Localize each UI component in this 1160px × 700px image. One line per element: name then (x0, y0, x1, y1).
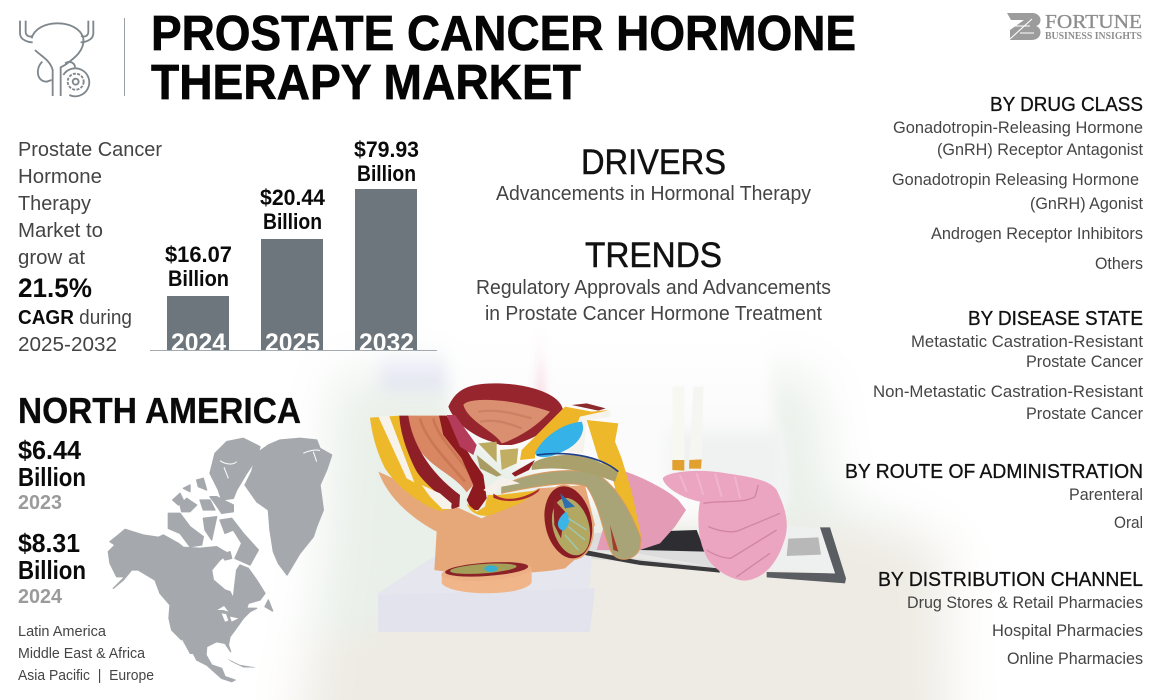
cross-section slab (442, 570, 532, 593)
text block: market growth summary: Prostate Cancer (18, 138, 162, 161)
bar 2024: 2024 (171, 329, 226, 357)
panel: by drug class: Gonadotropin-Releasing Hormone (893, 119, 1143, 137)
anatomical pelvic model (370, 383, 642, 632)
list: other regions: Latin America (18, 623, 107, 640)
list: other regions (18, 623, 154, 684)
list: other regions: Asia Pacific | Europe (18, 667, 154, 684)
panel: by disease state (873, 308, 1143, 423)
panel: North America heading and values: Billion (18, 462, 86, 492)
panel: by disease state: BY DISEASE STATE (968, 308, 1143, 330)
text block: market growth summary: 21.5% (18, 273, 92, 303)
text block: market growth summary: Hormone (18, 165, 102, 188)
panel: by route of administration: BY ROUTE OF ADMINISTRATION (845, 461, 1143, 483)
bar 2032: Billion (357, 161, 416, 186)
panel: by distribution channel (878, 569, 1143, 668)
panel: by distribution channel: Hospital Pharmacies (992, 622, 1143, 640)
bar 2032 (354, 137, 419, 357)
Greenland (245, 438, 332, 575)
panel: by route of administration (845, 461, 1143, 532)
panel: trends: TRENDS (585, 236, 722, 275)
panel: by drug class: BY DRUG CLASS (990, 94, 1143, 116)
Arctic archipelago (168, 478, 258, 565)
panel: by distribution channel: Online Pharmacies (1007, 650, 1143, 668)
logo: Fortune Business Insights (1007, 11, 1142, 42)
text block: market growth summary: 2025-2032 (18, 333, 117, 356)
Ellesmere Island (210, 438, 260, 500)
bar 2024 (165, 245, 231, 350)
panel: by drug class: Androgen Receptor Inhibitors (931, 225, 1143, 243)
background photo: doctor with anatomical model (290, 355, 960, 700)
text block: market growth summary (18, 138, 162, 356)
panel: by drug class (892, 94, 1143, 273)
text block: market growth summary: CAGR during (18, 306, 132, 329)
panel: by disease state: Non-Metastatic Castration-Resistant (873, 383, 1143, 401)
panel: drivers: DRIVERS (581, 143, 726, 182)
skin body (378, 472, 595, 574)
text block: market growth summary: Therapy (18, 192, 92, 215)
prostate (477, 455, 502, 477)
panel: by distribution channel: Drug Stores & Retail Pharmacies (907, 594, 1143, 612)
text block: market growth summary: grow at (18, 246, 85, 269)
shaft (502, 471, 641, 559)
pelvis yellow tissue (370, 416, 451, 511)
bladder (448, 383, 563, 445)
panel: North America heading and values: 2024 (18, 586, 63, 608)
bar 2032: $79.93 (354, 137, 419, 162)
left glove (597, 470, 686, 550)
clipboard on table (585, 525, 846, 583)
panel: trends: Regulatory Approvals and Advancements (476, 277, 831, 299)
right glove (663, 471, 787, 581)
text block: market growth summary: Market to (18, 219, 103, 242)
bar 2024: Billion (168, 266, 229, 291)
panel: drivers: Advancements in Hormonal Therapy (496, 183, 811, 205)
panel: by drug class: Others (1095, 255, 1143, 273)
panel: by disease state: Prostate Cancer (1026, 353, 1143, 371)
panel: drivers (496, 143, 811, 205)
mainland (108, 529, 265, 682)
panel: by disease state: Prostate Cancer (1026, 405, 1143, 423)
panel: by drug class: (GnRH) Agonist (1030, 195, 1143, 213)
Caribbean and Newfoundland (228, 600, 273, 667)
map: North America and Greenland (108, 438, 332, 682)
panel: by route of administration: Parenteral (1069, 486, 1143, 504)
testis (537, 481, 600, 564)
white base (378, 557, 592, 632)
panel: by route of administration: Oral (1114, 514, 1143, 532)
panel: North America heading and values (18, 390, 301, 608)
panel: trends: in Prostate Cancer Hormone Treatment (485, 303, 822, 325)
panel: by disease state: Metastatic Castration-Resistant (911, 333, 1143, 351)
bar 2025: 2025 (265, 329, 320, 357)
blue cavity (535, 422, 583, 457)
bar 2025: Billion (263, 209, 322, 234)
rectal wall (408, 416, 473, 492)
panel: by drug class: Gonadotropin Releasing Hormone (892, 171, 1139, 189)
logo name: FORTUNE (1045, 11, 1142, 33)
photo backdrop: lab wall, coat, table (290, 355, 960, 700)
panel: trends (476, 236, 831, 325)
logo mark (1007, 13, 1041, 40)
title (151, 7, 856, 110)
bar chart: market size by year (150, 137, 437, 357)
bar 2032: 2032 (359, 329, 414, 357)
bar 2025: $20.44 (260, 185, 325, 210)
header divider (124, 18, 126, 96)
yellow outer shaft (587, 420, 642, 552)
title: PROSTATE CANCER HORMONE (151, 7, 856, 61)
panel: North America heading and values: $8.31 (18, 528, 80, 558)
gloved hands and applicators (597, 387, 787, 581)
panel: by drug class: (GnRH) Receptor Antagonist (937, 141, 1143, 159)
icon: bladder and prostate (20, 21, 93, 96)
logo: Fortune Business Insights: BUSINESS INSIGHTS (1045, 31, 1142, 42)
applicators (672, 387, 684, 461)
panel: North America heading and values: Billion (18, 555, 86, 585)
panel: North America heading and values: $6.44 (18, 435, 82, 465)
panel: North America heading and values: NORTH AMERICA (18, 390, 301, 431)
panel: North America heading and values: 2023 (18, 492, 62, 514)
panel: by distribution channel: BY DISTRIBUTION CHANNEL (878, 569, 1143, 591)
bar 2025 (260, 185, 325, 357)
bar 2024: $16.07 (165, 242, 232, 267)
title: THERAPY MARKET (151, 56, 581, 110)
list: other regions: Middle East & Africa (18, 645, 146, 662)
yellow front tissue (520, 407, 608, 460)
Great Lakes and coastal cuts (217, 606, 238, 622)
urethra (483, 477, 520, 495)
